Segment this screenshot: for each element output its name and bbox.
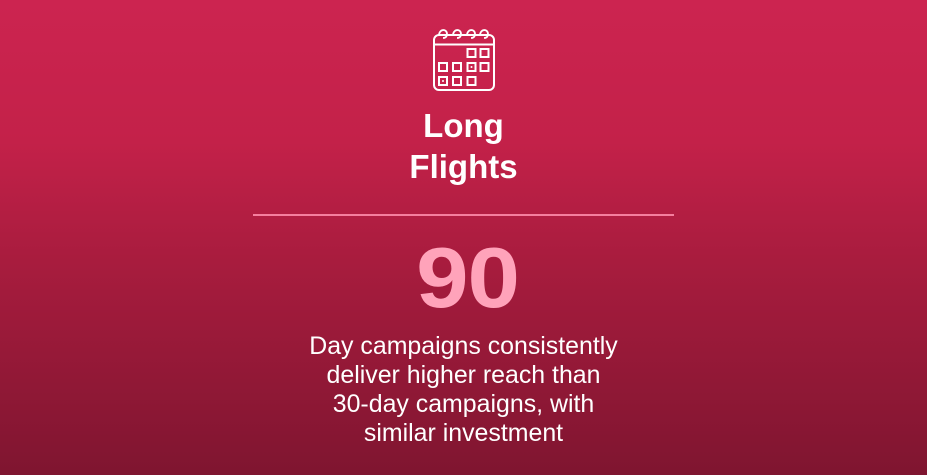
description text: 30-day campaigns, with [333, 390, 594, 418]
icon: calendar [433, 29, 495, 91]
statistic: 90: 90 [416, 231, 519, 326]
description text: Day campaigns consistently [309, 332, 618, 360]
description text: deliver higher reach than [327, 361, 600, 389]
description text: similar investment [364, 419, 563, 447]
description text [309, 332, 618, 447]
title: Long [423, 107, 504, 144]
title [409, 107, 518, 185]
title: Flights [409, 148, 518, 185]
